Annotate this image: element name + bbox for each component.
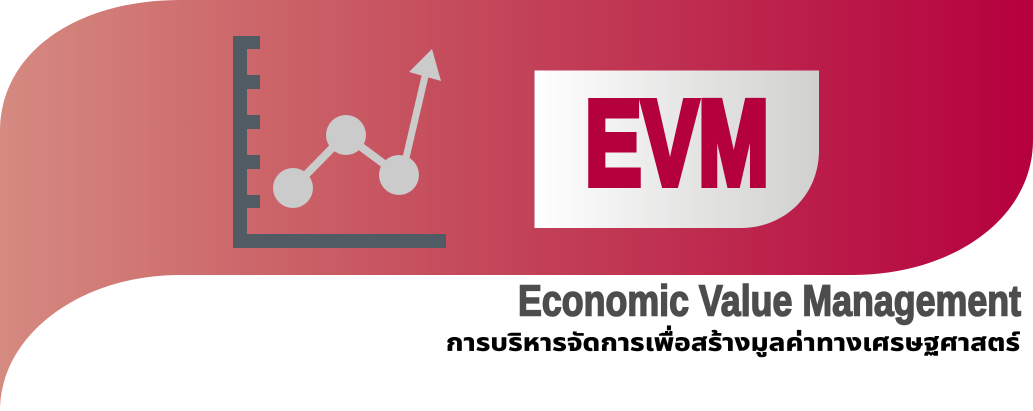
heading: EVM: EVM xyxy=(585,74,769,210)
chart line xyxy=(293,135,399,188)
chart point 3 xyxy=(379,155,419,195)
chart arrow shaft xyxy=(402,72,426,175)
chart point 2 xyxy=(326,115,366,155)
panel: EVM badge xyxy=(534,70,819,228)
chart axes xyxy=(233,36,446,248)
icon: line chart with rising arrow xyxy=(233,36,446,248)
subtitle: Thai title: การบริหารจัดการเพื่อสร้างมูลค่าทางเศรษฐศาสตร์ xyxy=(446,326,1020,358)
chart point 1 xyxy=(273,168,313,208)
chart arrowhead xyxy=(409,49,441,81)
